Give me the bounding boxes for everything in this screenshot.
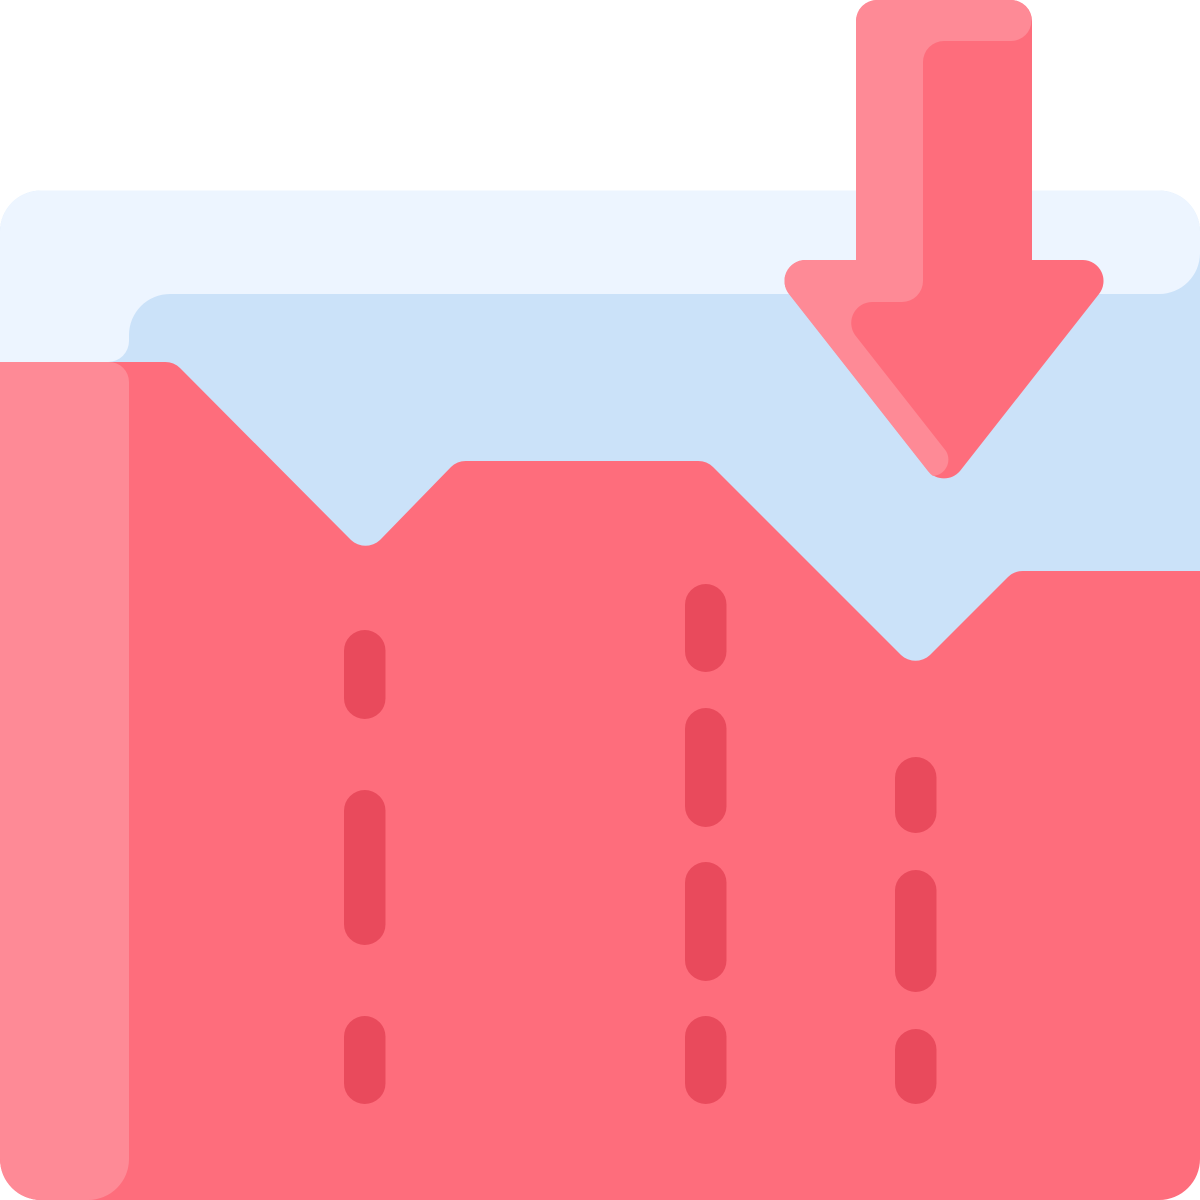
crack dashes left [344,630,386,1104]
crack dashes right [895,757,936,1104]
icon: down arrow [784,0,1104,478]
panel: red ground [0,362,1200,1200]
panel: sky background [0,190,1200,720]
crack dashes middle [685,584,726,1104]
